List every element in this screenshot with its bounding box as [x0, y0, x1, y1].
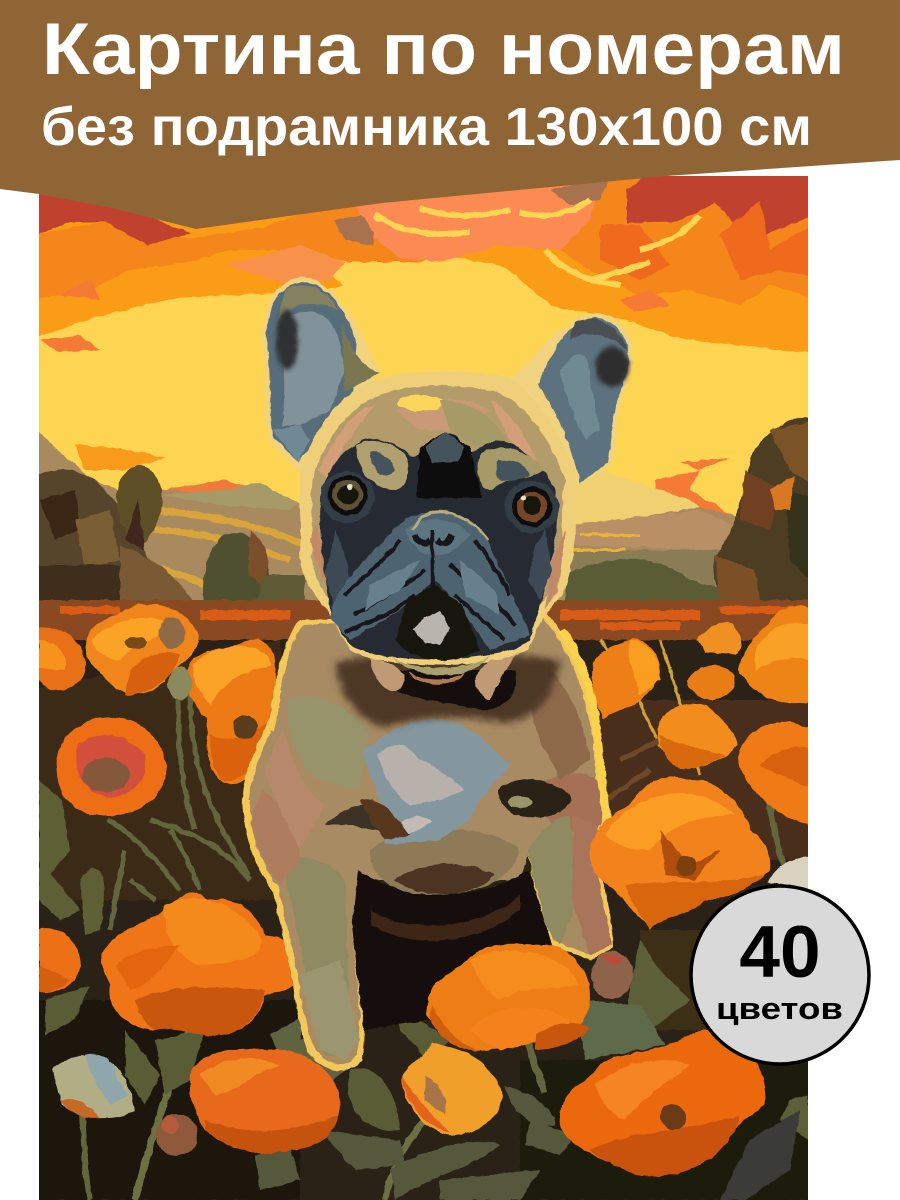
badge: 40 colours — [691, 886, 869, 1064]
ear left — [263, 278, 380, 473]
chest markings — [362, 719, 510, 845]
head — [299, 371, 577, 665]
title: Картина по номерам — [42, 9, 845, 90]
header banner — [0, 0, 900, 229]
highlight shoulder — [562, 630, 608, 825]
badge: 40 colours: цветов — [716, 991, 843, 1026]
leg dark centre — [352, 870, 552, 1030]
eyes — [320, 471, 559, 533]
sky — [39, 176, 808, 524]
leg colours — [280, 856, 350, 1056]
face mask — [320, 434, 557, 659]
neck dark — [335, 653, 560, 728]
stems and leaves — [82, 640, 785, 1200]
hills — [39, 432, 736, 601]
flowers right and front — [402, 606, 815, 1177]
painting: French bulldog in poppy field — [30, 170, 820, 1200]
muzzle — [330, 511, 530, 650]
badge: 40 colours: 40 — [739, 912, 821, 993]
ear right — [510, 313, 633, 487]
dog — [242, 278, 633, 1070]
trees — [30, 415, 820, 610]
field — [30, 600, 820, 1200]
body silhouette — [242, 612, 613, 1070]
subtitle: без подрамника 130х100 см — [41, 97, 812, 157]
chin and jowls — [395, 585, 480, 660]
flowers left side — [39, 604, 340, 1156]
